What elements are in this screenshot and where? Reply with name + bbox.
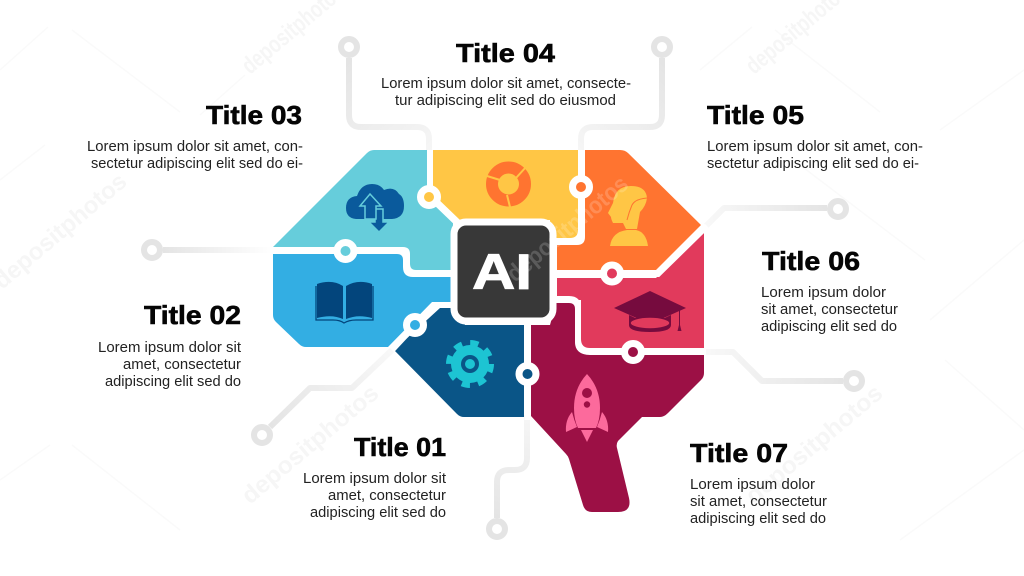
title 02: Title 02 (144, 300, 241, 330)
AI chip (454, 222, 553, 321)
title 06 (761, 246, 898, 335)
icon: open book (316, 282, 373, 323)
panel: 04 yellow (433, 150, 578, 238)
title 02: amet, consectetur (123, 357, 241, 373)
icon: cloud upload (346, 184, 404, 232)
icon: graduation cap (614, 291, 686, 332)
title 03: sectetur adipiscing elit sed do ei- (91, 156, 303, 172)
title 06: sit amet, consectetur (761, 302, 898, 318)
title 04: tur adipiscing elit sed do eiusmod (395, 93, 616, 109)
title 01: amet, consectetur (328, 488, 446, 504)
title 02: Lorem ipsum dolor sit (98, 340, 241, 356)
title 05: Title 05 (707, 100, 804, 130)
title 05 (707, 100, 923, 172)
title 04 (381, 38, 631, 109)
circuit nodes (337, 178, 642, 382)
panel: 07 dark crimson (531, 303, 704, 512)
watermark: depositphotos (741, 380, 888, 510)
title 06: Lorem ipsum dolor (761, 285, 886, 301)
icon: robot head (608, 186, 648, 246)
title 03: Title 03 (206, 100, 302, 130)
title 07: sit amet, consectetur (690, 494, 827, 510)
title 07 (690, 438, 827, 527)
title 05: sectetur adipiscing elit sed do ei- (707, 156, 919, 172)
watermark: depositphotos (237, 380, 384, 510)
panel: 06 crimson (557, 231, 704, 348)
icon: ring chart (487, 167, 526, 207)
title 06: adipiscing elit sed do (761, 319, 897, 335)
title 01 (303, 432, 446, 521)
title 01: adipiscing elit sed do (310, 505, 446, 521)
title 02: adipiscing elit sed do (105, 374, 241, 390)
connector lines (144, 39, 862, 537)
title 07: adipiscing elit sed do (690, 511, 826, 527)
title 07: Lorem ipsum dolor (690, 477, 815, 493)
title 01: Lorem ipsum dolor sit (303, 471, 446, 487)
title 01: Title 01 (354, 432, 446, 462)
icon: gear (449, 343, 491, 385)
title 05: Lorem ipsum dolor sit amet, con- (707, 139, 923, 155)
panel: 03 teal (273, 150, 453, 270)
icon: rocket (566, 374, 608, 442)
title 06: Title 06 (762, 246, 860, 276)
title 04: Title 04 (456, 38, 556, 68)
panel: 01 dark blue (394, 308, 524, 417)
panel: 02 blue (273, 254, 452, 347)
panel: 05 orange (557, 150, 701, 270)
white seams (270, 150, 707, 420)
watermark over brain: depositphotos (502, 170, 634, 288)
title 02 (98, 300, 241, 390)
title 07: Title 07 (690, 438, 788, 468)
title 03: Lorem ipsum dolor sit amet, con- (87, 139, 303, 155)
AI chip: AI (472, 244, 532, 300)
title 04: Lorem ipsum dolor sit amet, consecte- (381, 76, 631, 92)
title 03 (87, 100, 303, 172)
